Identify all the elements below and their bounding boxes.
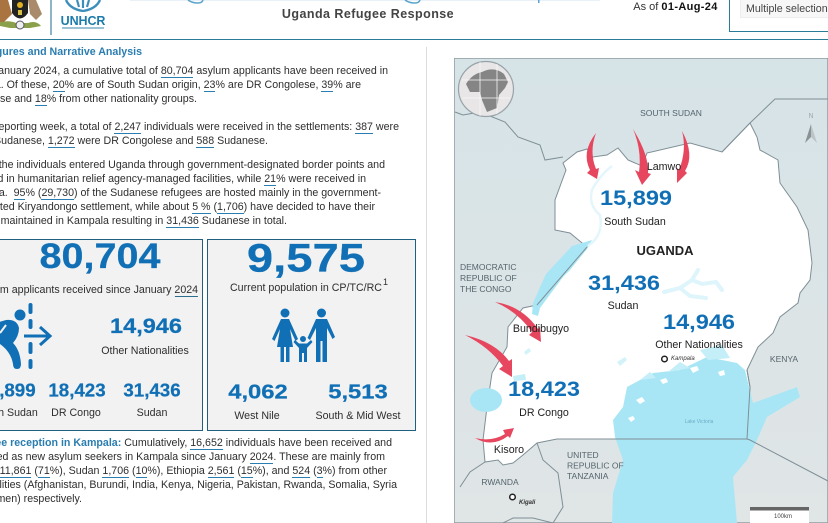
label: Kigali: Kigali bbox=[519, 500, 536, 506]
scale bar bbox=[750, 507, 809, 523]
lake: George bbox=[513, 374, 526, 381]
text block: reporting week bbox=[0, 121, 399, 148]
panel: asylum applicants bbox=[0, 239, 203, 431]
label: South Sudan: South Sudan bbox=[604, 216, 666, 228]
column divider bbox=[426, 47, 427, 523]
figure: DR Congo: 18,423 bbox=[508, 378, 580, 401]
as-of date: As of 01-Aug-24 bbox=[633, 1, 718, 13]
label: Kigali bbox=[510, 494, 536, 506]
arrow: Bundibugyo bbox=[495, 302, 541, 342]
arrow: South Sudan left bbox=[587, 133, 599, 179]
logo divider bbox=[50, 0, 52, 35]
label: DR Congo: DR Congo bbox=[519, 407, 569, 419]
label: Rwanda country: RWANDA bbox=[481, 477, 519, 487]
title (cropped at top edge) bbox=[130, 0, 600, 4]
Sudan figure: 31,436 bbox=[123, 380, 181, 400]
label: Uganda country: UGANDA bbox=[636, 243, 694, 258]
map of Uganda bbox=[454, 58, 828, 523]
icon: family bbox=[272, 308, 335, 362]
current population label: Current population in CP/TC/RC bbox=[230, 282, 382, 294]
filter box bbox=[729, 0, 828, 32]
figure: Other Nationalities: 14,946 bbox=[663, 311, 735, 334]
label: DRC country: DEMOCRATIC bbox=[460, 262, 517, 272]
label: South Sudan country: SOUTH SUDAN bbox=[640, 108, 702, 118]
South and Mid West label: South & Mid West bbox=[316, 410, 400, 422]
label: Lake Victoria: Lake Victoria bbox=[685, 419, 714, 425]
label: Kenya country: KENYA bbox=[770, 354, 798, 364]
arrow: DR Congo bbox=[465, 335, 512, 377]
arrow: South Sudan centre bbox=[633, 129, 651, 185]
subtitle: Uganda Refugee Response bbox=[282, 6, 454, 20]
label: Kampala: Kampala bbox=[671, 356, 695, 362]
filter selection: Multiple selection bbox=[746, 3, 828, 15]
label: Tanzania country: UNITED bbox=[567, 450, 599, 460]
icon: person crossing border bbox=[0, 303, 52, 369]
logo: UNHCR bbox=[61, 0, 106, 29]
label: DRC country: THE CONGO bbox=[460, 284, 512, 294]
label: Bundibugyo: Bundibugyo bbox=[513, 323, 569, 335]
filter selection bbox=[740, 0, 828, 18]
figure: South Sudan: 15,899 bbox=[600, 187, 672, 210]
globe inset bbox=[458, 62, 514, 116]
country: Uganda bbox=[483, 123, 812, 465]
arrow: South Sudan right bbox=[677, 131, 689, 183]
text block: cumulative arrivals bbox=[0, 65, 388, 106]
logo: UNHCR: UNHCR bbox=[61, 14, 105, 28]
header bbox=[0, 0, 828, 40]
West Nile label: West Nile bbox=[234, 410, 280, 422]
label: Tanzania country: TANZANIA bbox=[567, 471, 609, 481]
label: Sudan: Sudan bbox=[608, 300, 638, 312]
DR Congo label: DR Congo bbox=[51, 407, 101, 419]
lake: Victoria bbox=[612, 357, 800, 523]
figure: Sudan: 31,436 bbox=[588, 272, 660, 295]
other nationalities label: Other Nationalities bbox=[101, 345, 189, 357]
logo: Uganda coat of arms bbox=[0, 0, 42, 30]
lake: Edward bbox=[470, 388, 502, 412]
lake: Albert bbox=[532, 240, 592, 316]
label: Kisoro: Kisoro bbox=[494, 444, 524, 456]
arrow: Kisoro bbox=[475, 428, 514, 443]
text block: entry and settlement bbox=[0, 159, 385, 228]
label: Other Nationalities: Other Nationalities bbox=[655, 339, 743, 351]
Sudan label: Sudan bbox=[137, 407, 167, 419]
river: Nile bbox=[588, 166, 612, 246]
panel: current population bbox=[207, 239, 416, 431]
small lakes bbox=[524, 348, 627, 366]
label: Tanzania country: REPUBLIC OF bbox=[567, 460, 624, 470]
DR Congo figure: 18,423 bbox=[48, 380, 105, 400]
current population label bbox=[230, 277, 388, 294]
north arrow bbox=[805, 113, 817, 143]
north arrow: N bbox=[808, 113, 814, 120]
South and Mid West figure: 5,513 bbox=[328, 382, 388, 404]
text block: reception in Kampala bbox=[0, 437, 398, 505]
panel: current population: 1 bbox=[383, 277, 388, 287]
lake: Kyoga bbox=[664, 270, 722, 298]
scale bar: 100km bbox=[774, 514, 792, 520]
borders bbox=[455, 99, 828, 523]
other nationalities number: 14,946 bbox=[110, 315, 182, 338]
label: DRC country: REPUBLIC OF bbox=[460, 273, 517, 283]
label: Lamwo: Lamwo bbox=[647, 161, 681, 173]
West Nile figure: 4,062 bbox=[228, 382, 287, 404]
